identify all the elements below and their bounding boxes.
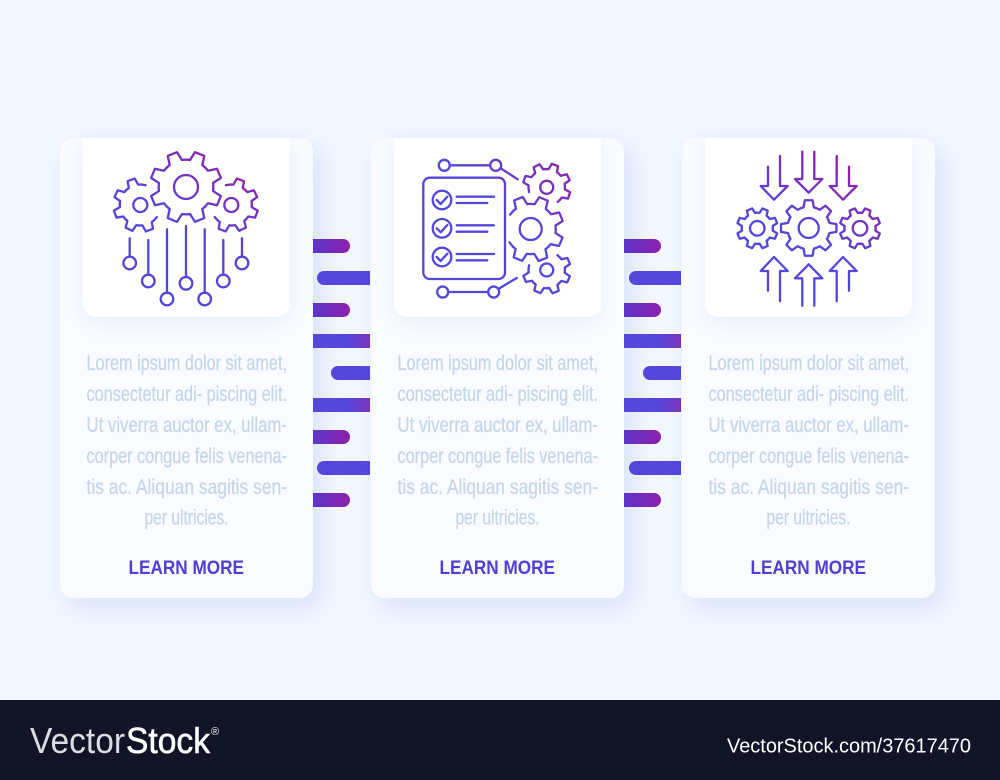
panel: card 1 [60,138,313,598]
connector bars between card 2 and card 3 [624,239,681,507]
icon: gears with circuit lines [112,151,259,306]
connector bars between card 1 and card 2 [313,239,370,507]
link: learn more: LEARN MORE [440,558,555,579]
body text [86,352,287,530]
body text [398,352,598,530]
icon: checklist with gears [422,158,572,299]
icon tile: gears and arrows [705,138,912,317]
footer band with VectorStock branding: VectorStock.com/37617470 [727,736,971,758]
body text: per ultricies. [456,506,540,530]
body text: per ultricies. [144,506,228,530]
footer band with VectorStock branding [0,700,1000,780]
panel: card 2 [371,138,624,598]
footer band with VectorStock branding: ® [211,726,219,738]
link: learn more: LEARN MORE [750,558,866,579]
icon: gears with converging arrows [736,150,881,307]
link: learn more: LEARN MORE [128,558,244,579]
body text [708,352,909,530]
footer band with VectorStock branding: Vector [30,720,125,761]
footer band with VectorStock branding: Stock [126,720,211,761]
panel: card 3 [682,138,935,598]
body text: per ultricies. [766,506,850,530]
icon tile: gears and circuit lines [83,138,290,317]
icon tile: checklist and gears [398,158,596,322]
